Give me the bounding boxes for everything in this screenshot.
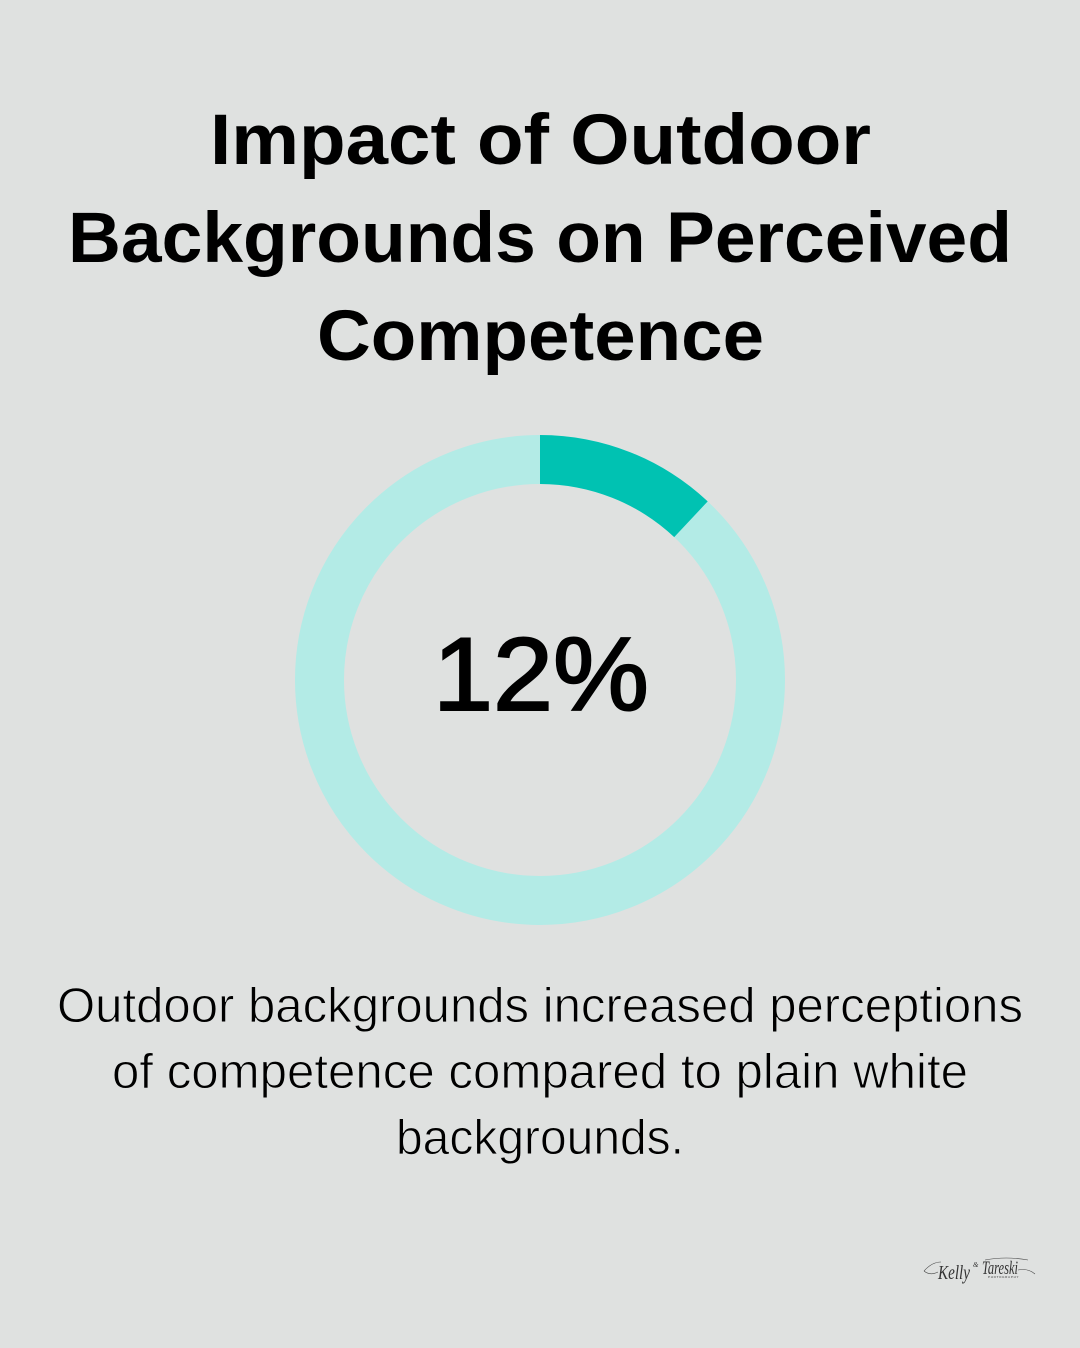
description text: of competence compared to plain white xyxy=(112,1045,968,1099)
description text: backgrounds. xyxy=(396,1111,684,1165)
title: Competence xyxy=(317,297,764,376)
title: Impact of Outdoor xyxy=(210,101,871,180)
donut chart: 12% xyxy=(320,435,760,900)
description text xyxy=(57,979,1023,1165)
logo: photographer signature: Tareski xyxy=(982,1258,1018,1279)
description text: Outdoor backgrounds increased perceptions xyxy=(57,979,1023,1033)
logo: photographer signature xyxy=(924,1258,1035,1284)
logo: photographer signature: PHOTOGRAPHY xyxy=(988,1275,1019,1279)
donut segment: 12 percent xyxy=(540,435,708,537)
donut value: 12% xyxy=(433,617,649,733)
logo: photographer signature: & xyxy=(973,1261,979,1269)
donut track xyxy=(320,460,760,900)
logo: photographer signature: Kelly xyxy=(937,1262,970,1284)
title xyxy=(68,101,1012,376)
title: Backgrounds on Perceived xyxy=(68,199,1012,278)
